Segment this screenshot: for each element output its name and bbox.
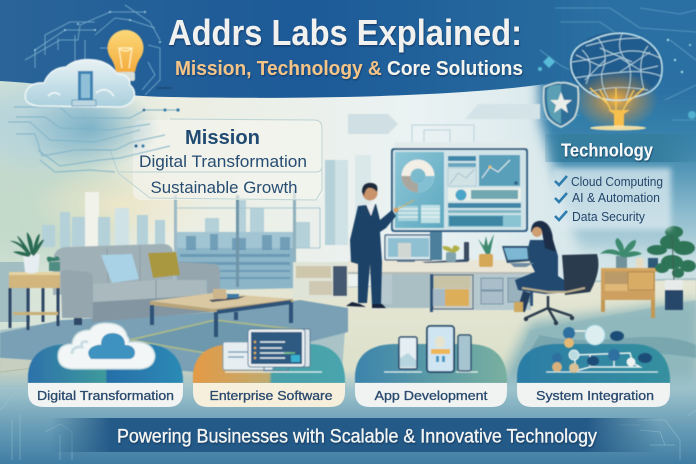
sofa bbox=[53, 244, 220, 325]
card: enterprise software bbox=[193, 329, 345, 407]
cloud bbox=[25, 60, 135, 107]
seated woman with laptop and chair bbox=[502, 221, 598, 325]
donut chart bbox=[406, 164, 430, 188]
large dashboard monitor bbox=[391, 142, 528, 260]
mission item: digital transformation: Digital Transformation bbox=[139, 152, 307, 171]
tech item: data security: Data Security bbox=[572, 209, 645, 224]
card: digital transformation bbox=[28, 323, 183, 407]
desk plant and vase bbox=[443, 234, 494, 267]
title: Addrs Labs Explained: bbox=[168, 12, 522, 53]
mission panel bbox=[36, 119, 323, 200]
tech item: ai and automation: AI & Automation bbox=[572, 190, 660, 205]
icon: phones bbox=[384, 326, 478, 372]
floor and rug bbox=[0, 278, 696, 420]
icon: cloud circuits and lightbulb bbox=[8, 5, 180, 172]
mission heading: Mission bbox=[185, 126, 260, 149]
city skyline through window bbox=[42, 104, 540, 292]
subtitle: Mission, Technology & Core Solutions bbox=[175, 58, 523, 80]
card: system integration bbox=[517, 325, 670, 407]
header background bbox=[0, 0, 620, 98]
icon: neural brain bbox=[538, 8, 696, 130]
icon: shield with star bbox=[544, 82, 578, 127]
office desk with cabinets bbox=[293, 234, 536, 312]
icon: software windows bbox=[223, 329, 322, 372]
bottom band background bbox=[0, 370, 696, 464]
mission item: sustainable growth: Sustainable Growth bbox=[150, 178, 298, 197]
technology background panel bbox=[535, 0, 696, 262]
icon: connected nodes bbox=[546, 325, 658, 373]
lightbulb bbox=[108, 30, 144, 81]
label: app development: App Development bbox=[374, 389, 488, 403]
technology panel bbox=[545, 134, 696, 230]
header blend into technology panel bbox=[580, 0, 696, 100]
card: app development bbox=[355, 326, 507, 407]
side table with plant bbox=[9, 232, 60, 330]
tech item: cloud computing: Cloud Computing bbox=[571, 174, 663, 189]
side cabinet with plants bbox=[600, 226, 696, 318]
presenter man bbox=[346, 183, 414, 308]
label: enterprise software: Enterprise Software bbox=[210, 389, 333, 403]
technology heading banner bbox=[545, 134, 696, 162]
small monitor on desk bbox=[385, 235, 432, 262]
coffee table bbox=[150, 289, 293, 337]
label: digital transformation: Digital Transformation bbox=[37, 389, 174, 403]
technology heading banner: Technology bbox=[561, 140, 653, 160]
tagline banner bbox=[50, 418, 660, 452]
tagline banner: Powering Businesses with Scalable & Innovative Technology bbox=[117, 426, 597, 448]
label: system integration: System Integration bbox=[536, 389, 654, 403]
icon: cloud bbox=[58, 323, 155, 369]
